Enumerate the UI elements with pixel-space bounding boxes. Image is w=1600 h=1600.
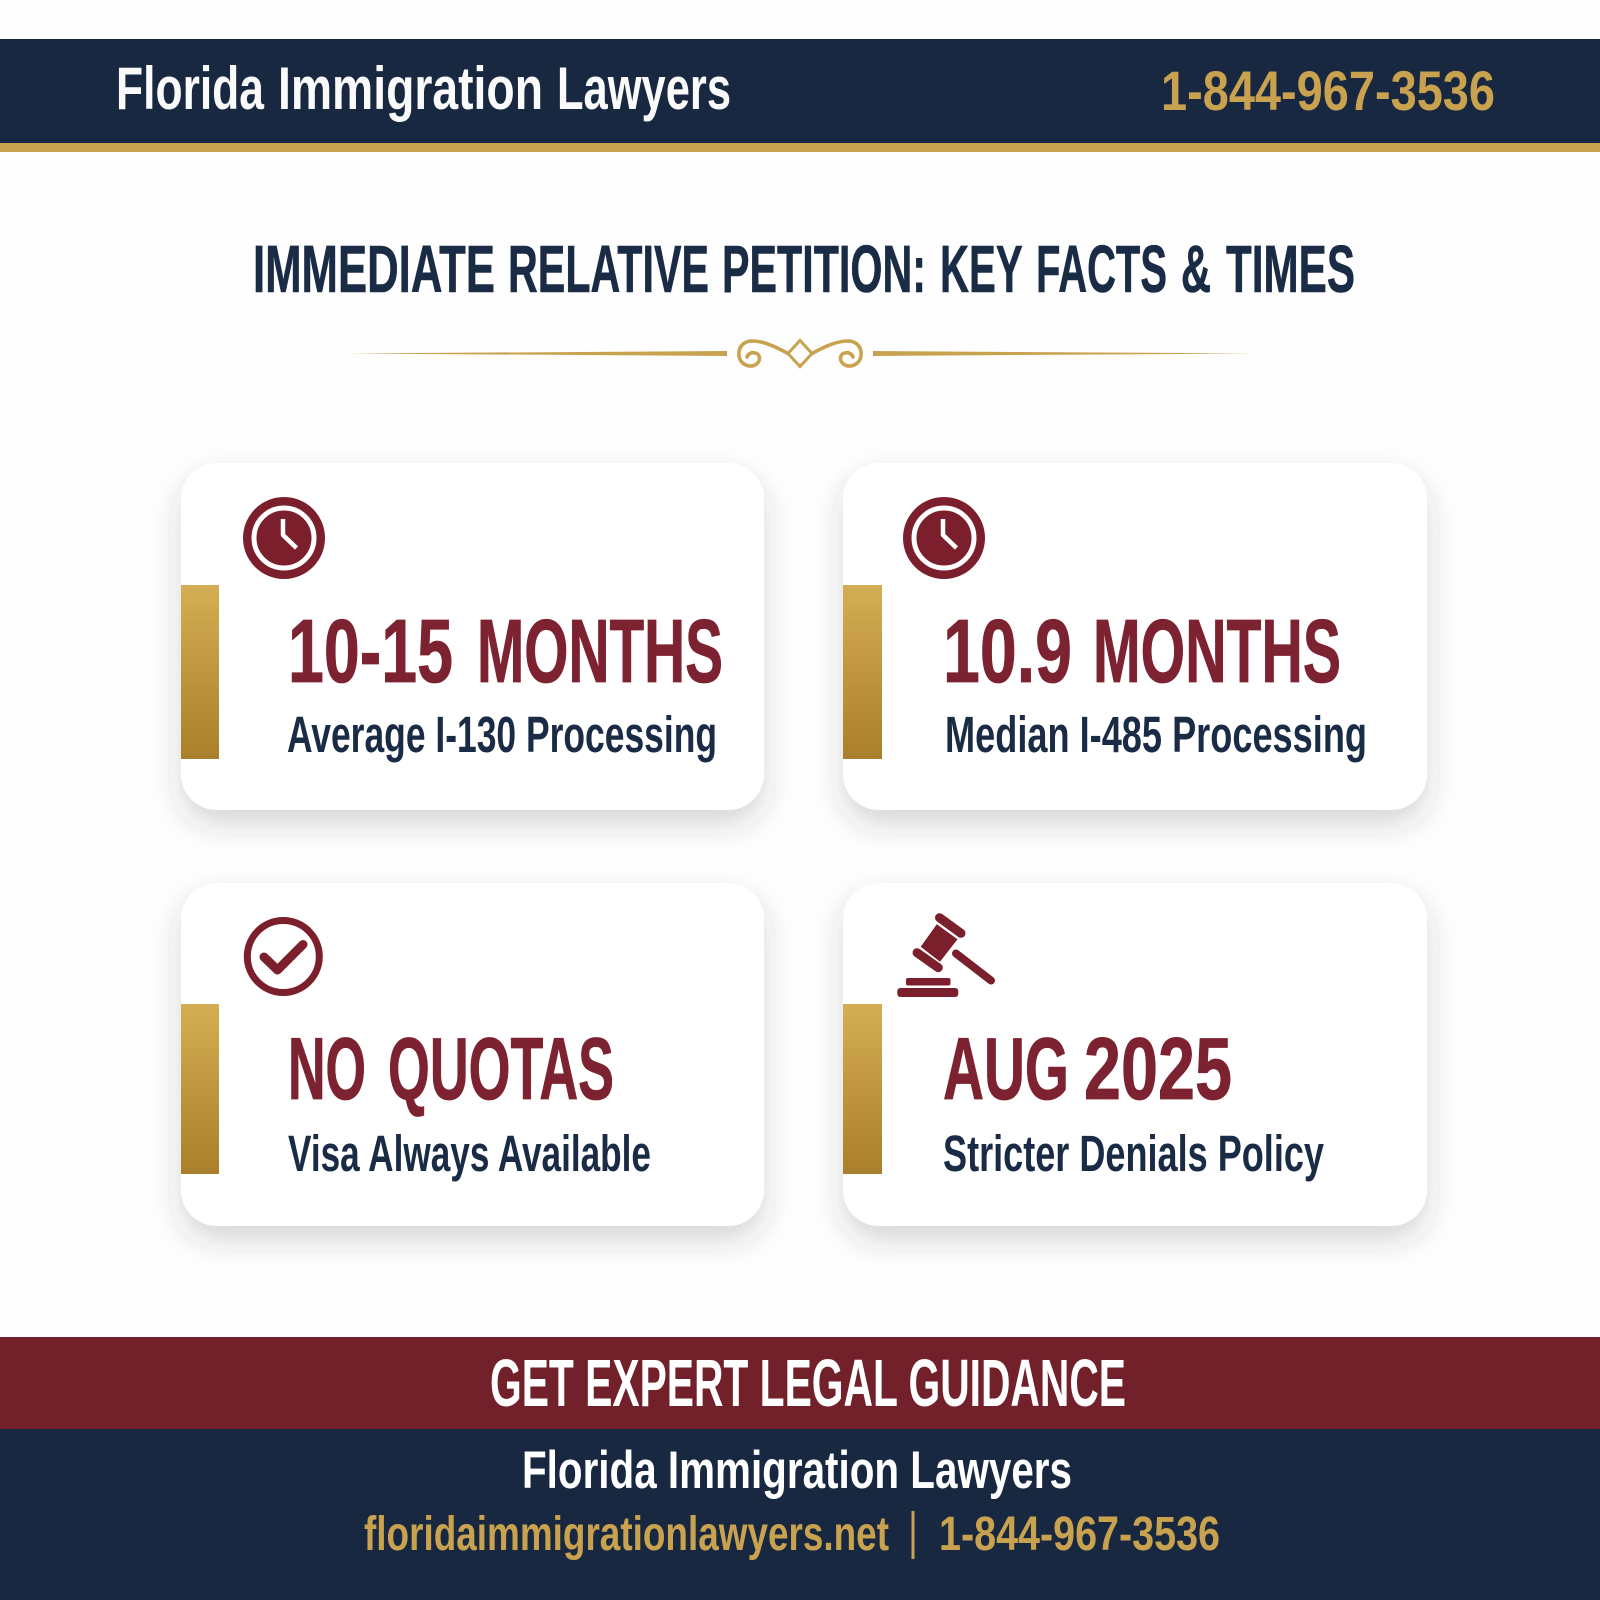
card: I-130 processing: [181, 463, 764, 810]
main title: RELATIVE: [508, 232, 709, 307]
card: Aug 2025 policy: [843, 883, 1427, 1226]
accent bar: [843, 585, 882, 759]
header phone number: 1-844-967-3536: [1161, 59, 1495, 122]
header firm name: Immigration: [278, 55, 543, 122]
card: I-485 processing: [843, 463, 1427, 810]
main title: FACTS: [1036, 232, 1167, 307]
ornamental divider: [347, 340, 1254, 366]
header band: [0, 39, 1600, 152]
accent bar: [843, 1004, 882, 1174]
header firm name: Lawyers: [557, 55, 731, 122]
call to action band: [0, 1337, 1600, 1429]
icon: clock: [903, 497, 985, 579]
stat value: 2025: [1084, 1019, 1232, 1118]
accent bar: [181, 1004, 219, 1174]
stat value: MONTHS: [477, 602, 723, 702]
stat value: 10.9: [943, 602, 1072, 702]
icon: check mark: [247, 920, 319, 992]
footer firm name: Florida Immigration Lawyers: [522, 1441, 1072, 1500]
stat value: NO: [288, 1019, 366, 1118]
stat label: Average I-130 Processing: [287, 706, 717, 763]
footer website: floridaimmigrationlawyers.net: [364, 1508, 889, 1561]
stat value: AUG: [943, 1019, 1069, 1118]
footer band: [0, 1429, 1600, 1600]
icon: gavel: [897, 918, 991, 997]
stat value: MONTHS: [1093, 602, 1341, 702]
main title: PETITION:: [722, 232, 926, 307]
main title: TIMES: [1226, 232, 1355, 307]
footer separator: [912, 1511, 914, 1559]
footer phone number: 1-844-967-3536: [939, 1508, 1220, 1561]
call to action text: GET EXPERT LEGAL GUIDANCE: [490, 1346, 1126, 1421]
stat value: 10-15: [288, 602, 453, 702]
icon: clock: [243, 497, 325, 579]
card: no quotas: [181, 883, 764, 1226]
stat label: Median I-485 Processing: [945, 706, 1367, 763]
main title: &: [1181, 232, 1211, 307]
stat label: Stricter Denials Policy: [943, 1125, 1324, 1182]
header firm name: Florida: [116, 55, 264, 122]
main title: KEY: [940, 232, 1022, 307]
stat label: Visa Always Available: [288, 1125, 651, 1182]
accent bar: [181, 585, 219, 759]
stat value: QUOTAS: [388, 1019, 614, 1118]
main title: IMMEDIATE: [253, 232, 495, 307]
